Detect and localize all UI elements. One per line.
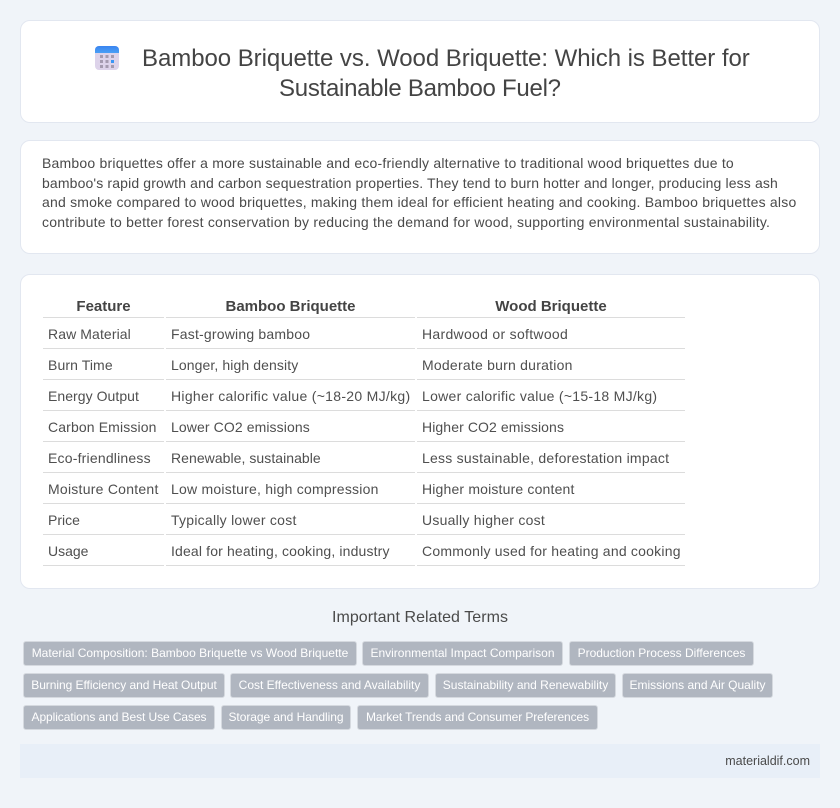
intro text: bamboo's rapid growth and carbon sequestration properties. They tend to burn hotter and longer, producing less ash [42, 174, 778, 190]
comparison table [43, 298, 685, 566]
related terms tags: Sustainability and Renewability [443, 678, 608, 692]
related terms tags: Emissions and Air Quality [629, 678, 766, 692]
comparison table: Lower calorific value (~15-18 MJ/kg) [422, 388, 657, 404]
comparison table: Typically lower cost [171, 512, 297, 528]
footer bar [20, 744, 820, 778]
related terms tags: Burning Efficiency and Heat Output [31, 678, 217, 692]
comparison table: Eco-friendliness [48, 450, 151, 466]
related terms tags: Market Trends and Consumer Preferences [366, 710, 589, 724]
comparison table panel [20, 274, 820, 589]
comparison table: Usage [48, 543, 88, 559]
title: Sustainable Bamboo Fuel? [279, 75, 561, 102]
comparison table: Usually higher cost [422, 512, 545, 528]
comparison table: Feature [76, 298, 131, 315]
comparison table: Energy Output [48, 388, 139, 404]
footer source: materialdif.com [725, 754, 810, 768]
comparison table: Price [48, 512, 80, 528]
title [142, 45, 750, 102]
related terms tags [23, 641, 773, 730]
intro text: and smoke compared to wood briquettes, making them ideal for efficient heating and cooking. Bamboo briquettes also [42, 194, 796, 210]
related terms tags: Storage and Handling [228, 710, 344, 724]
icon: calendar [95, 46, 119, 70]
intro text: Bamboo briquettes offer a more sustainable and eco-friendly alternative to traditional wood briquettes due to [42, 155, 734, 171]
comparison table: Fast-growing bamboo [171, 326, 310, 342]
comparison table: Low moisture, high compression [171, 481, 379, 497]
comparison table: Longer, high density [171, 357, 298, 373]
intro text [42, 155, 796, 230]
related terms heading: Important Related Terms [332, 609, 508, 626]
header card [20, 20, 820, 123]
comparison table: Moderate burn duration [422, 357, 573, 373]
related terms tags: Material Composition: Bamboo Briquette vs Wood Briquette [32, 646, 348, 660]
comparison table: Commonly used for heating and cooking [422, 543, 681, 559]
intro panel [20, 140, 820, 254]
comparison table: Carbon Emission [48, 419, 157, 435]
comparison table: Raw Material [48, 326, 131, 342]
comparison table: Higher CO2 emissions [422, 419, 564, 435]
title: Bamboo Briquette vs. Wood Briquette: Which is Better for [142, 45, 750, 72]
comparison table: Lower CO2 emissions [171, 419, 310, 435]
related terms tags: Applications and Best Use Cases [32, 710, 206, 724]
intro text: contribute to better forest conservation by reducing the demand for wood, supporting environmental sustainability. [42, 214, 770, 230]
comparison table: Bamboo Briquette [225, 298, 356, 315]
comparison table: Wood Briquette [495, 298, 607, 315]
comparison table: Ideal for heating, cooking, industry [171, 543, 390, 559]
related terms tags: Cost Effectiveness and Availability [239, 678, 420, 692]
comparison table: Higher moisture content [422, 481, 575, 497]
comparison table: Hardwood or softwood [422, 326, 568, 342]
comparison table: Renewable, sustainable [171, 450, 321, 466]
related terms tags: Environmental Impact Comparison [370, 646, 555, 660]
comparison table: Burn Time [48, 357, 113, 373]
comparison table: Moisture Content [48, 481, 159, 497]
comparison table: Less sustainable, deforestation impact [422, 450, 669, 466]
comparison table: Higher calorific value (~18-20 MJ/kg) [171, 388, 410, 404]
related terms tags: Production Process Differences [578, 646, 745, 660]
